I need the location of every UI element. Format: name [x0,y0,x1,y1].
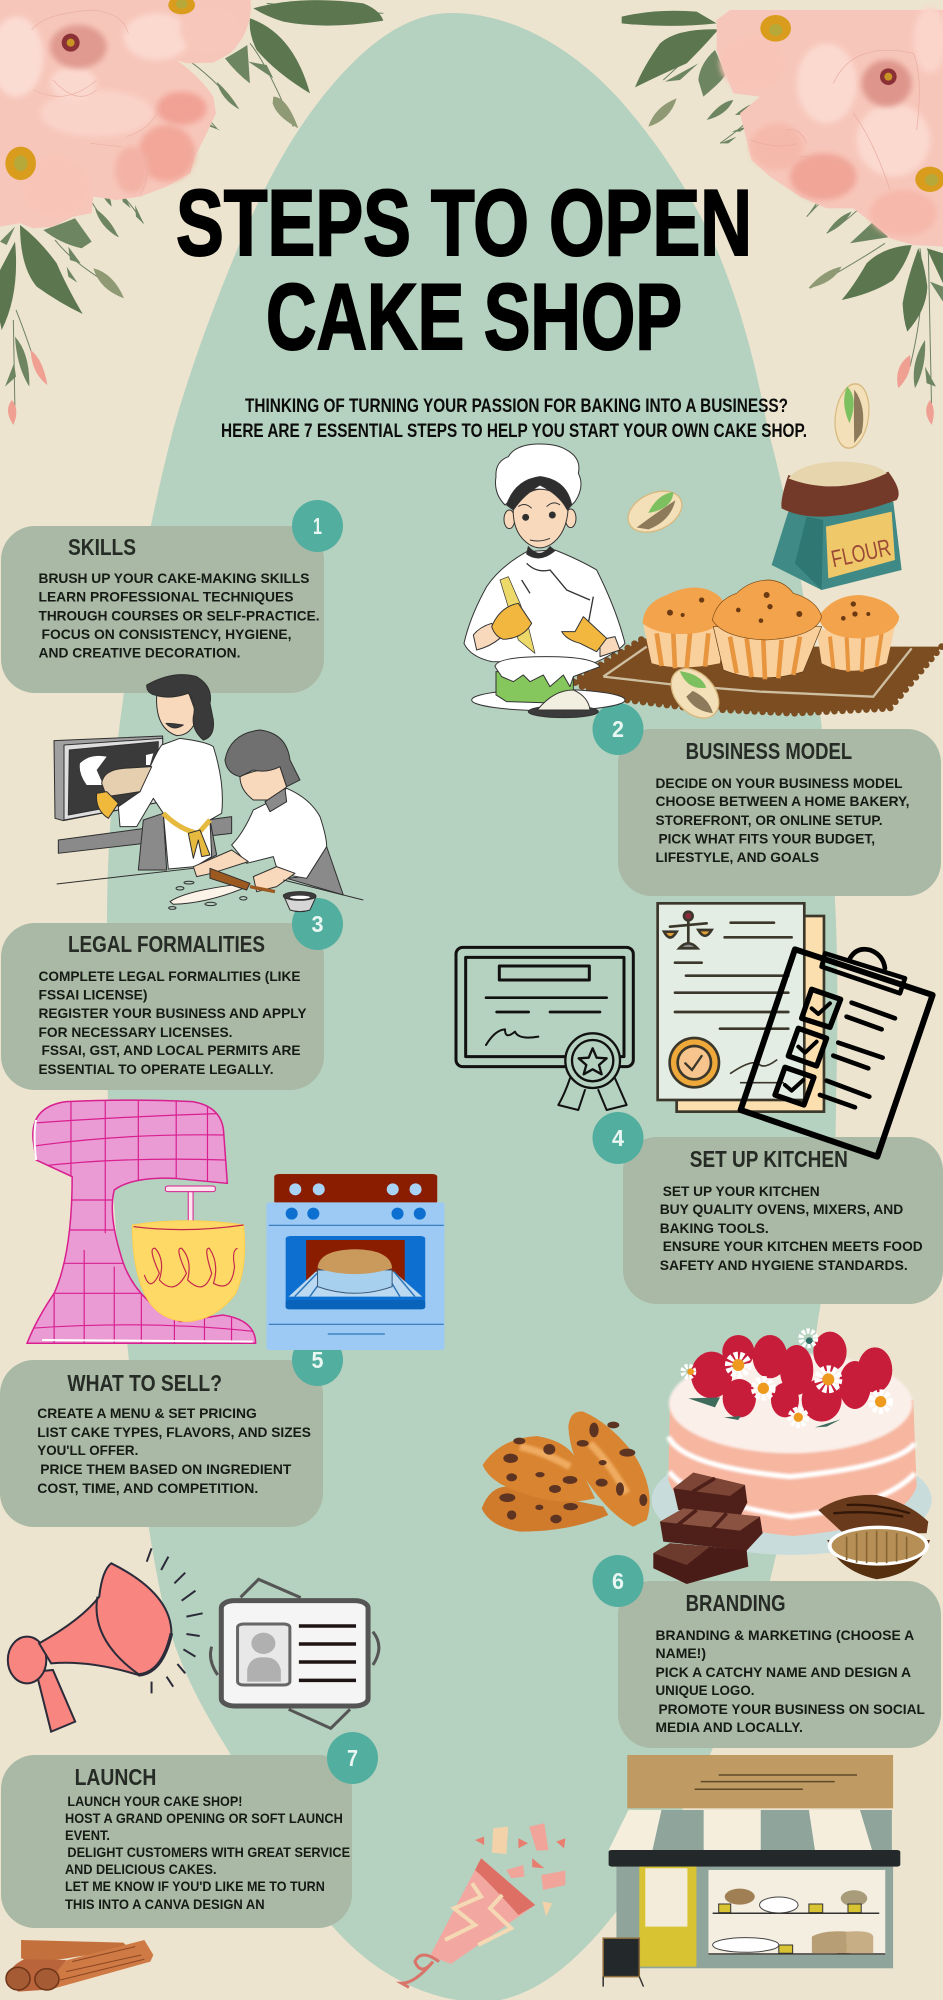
text: launch body: THIS INTO A CANVA DESIGN AN [65,1896,265,1912]
title: CAKE SHOP [266,264,682,369]
icon: oven [266,1174,444,1350]
text: launch body: DELIGHT CUSTOMERS WITH GREAT SERVICE [67,1844,350,1860]
badge 4: 4 [612,1125,624,1151]
text: kitchen body: BUY QUALITY OVENS, MIXERS, AND [660,1201,903,1217]
text: business model body: STOREFRONT, OR ONLINE SETUP. [656,812,882,828]
badge 3 [292,898,343,950]
icon: center muffin [712,580,822,679]
icon: stand mixer [27,1100,256,1343]
subtitle: THINKING OF TURNING YOUR PASSION FOR BAKING INTO A BUSINESS? [245,395,788,417]
text: branding body: UNIQUE LOGO. [656,1682,754,1698]
badge 2: 2 [612,716,624,742]
shop door [639,1867,696,1967]
gloves [492,603,532,639]
text: legal body: FSSAI, GST, AND LOCAL PERMITS ARE [42,1042,300,1058]
text: kitchen body [660,1183,923,1273]
pink blooms left [0,0,251,228]
badge 1: 1 [313,513,322,539]
illustration: chef [464,444,625,718]
text: legal body: COMPLETE LEGAL FORMALITIES (LIKE [38,968,300,984]
text: what to sell body [37,1405,311,1496]
text: launch body: AND DELICIOUS CAKES. [65,1861,216,1877]
panel: step 2 business model [592,703,941,896]
title: STEPS TO OPEN [176,170,752,275]
heading: branding: BRANDING [686,1590,786,1616]
badge 7: 7 [347,1745,358,1771]
badge 3: 3 [312,911,324,937]
panel: step 6 branding [592,1555,941,1748]
panel: step 5 what to sell [0,1334,343,1527]
walls [616,1867,893,1968]
text: skills body: AND CREATIVE DECORATION. [38,644,240,660]
text: legal body: FOR NECESSARY LICENSES. [38,1024,232,1040]
text: launch body: EVENT. [65,1827,110,1843]
subtitle [221,395,807,442]
panel: step 4 set up kitchen [592,1112,943,1304]
badge 4 [592,1112,644,1164]
text: launch body: LAUNCH YOUR CAKE SHOP! [67,1793,242,1809]
text: skills body: BRUSH UP YOUR CAKE-MAKING SKILLS [38,570,310,586]
icon: pistachio [622,483,688,540]
badge 2 [592,703,644,755]
mixer bowl [132,1186,245,1322]
icon: cinnamon sticks [6,1940,153,1992]
icon: chocolate bars [653,1473,763,1584]
text: branding body: PROMOTE YOUR BUSINESS ON SOCIAL [658,1701,925,1717]
text: launch body [65,1793,350,1912]
illustration: bakery shop [603,1755,900,1987]
icon: legal document [658,903,824,1112]
leaves and stems left [0,0,383,425]
text: branding body: MEDIA AND LOCALLY. [656,1719,803,1735]
text: kitchen body: SAFETY AND HYGIENE STANDARDS. [660,1257,908,1273]
head [504,510,515,529]
text: branding body: NAME!) [656,1645,706,1661]
illustration: legal documents [456,903,933,1157]
text: what to sell body: YOU'LL OFFER. [37,1442,138,1458]
oven [54,736,163,821]
badge 1 [292,500,343,552]
text: skills body: THROUGH COURSES OR SELF-PRACTICE. [38,608,320,624]
text: legal body: REGISTER YOUR BUSINESS AND APPLY [38,1005,307,1021]
icon: party popper [402,1823,565,1987]
illustration: muffins flour and pistachios [464,444,942,727]
icon: certificate [456,947,633,1110]
floral corner: top left [0,0,383,425]
badge 7 [327,1732,378,1784]
text: kitchen body: BAKING TOOLS. [660,1220,769,1236]
heading: what to sell: WHAT TO SELL? [67,1370,222,1396]
icon: id card [210,1579,379,1728]
illustration: two bakers [54,675,363,912]
text: business model body [656,775,910,865]
text: skills body: LEARN PROFESSIONAL TECHNIQUES [38,588,294,604]
daisies [683,1331,889,1425]
icon: pistachio on cloth [662,659,728,727]
text: business model body: DECIDE ON YOUR BUSINESS MODEL [656,775,903,791]
work table [57,868,363,900]
text: branding body: BRANDING & MARKETING (CHOOSE A [656,1627,914,1643]
illustration: cake cookies chocolate and cocoa [482,1331,932,1584]
text: what to sell body: CREATE A MENU & SET PRICING [37,1405,257,1421]
baker two [193,730,343,895]
piping bag [500,577,535,653]
text: launch body: LET ME KNOW IF YOU'D LIKE ME TO TURN [65,1878,325,1894]
panel: step 3 legal formalities [1,898,343,1090]
text: kitchen body: SET UP YOUR KITCHEN [663,1183,820,1199]
icon: cocoa pod [818,1495,930,1579]
icon: flour sack [772,462,902,590]
pink blooms right [717,7,943,247]
heading: set up kitchen: SET UP KITCHEN [690,1146,848,1172]
chalkboard [603,1938,643,1987]
heading: legal formalities: LEGAL FORMALITIES [68,931,265,957]
shop sign [627,1755,893,1808]
text: business model body: CHOOSE BETWEEN A HOME BAKERY, [656,793,910,809]
text: kitchen body: ENSURE YOUR KITCHEN MEETS FOOD [663,1238,923,1254]
central green oval [107,13,837,2000]
badge 6: 6 [612,1568,624,1594]
heading: skills: SKILLS [68,534,136,560]
text: what to sell body: LIST CAKE TYPES, FLAVORS, AND SIZES [37,1424,311,1440]
text: what to sell body: COST, TIME, AND COMPETITION. [37,1480,258,1496]
shop window [708,1870,885,1955]
badge 5 [292,1334,343,1386]
baker one [96,675,222,870]
leaves and stems right [622,11,943,425]
heading: launch: LAUNCH [75,1764,156,1790]
icon: clipboard checklist [741,949,933,1157]
icon: brown cloth [573,638,942,713]
cake [496,672,573,703]
text: business model body: PICK WHAT FITS YOUR BUDGET, [658,830,875,846]
icon: layered strawberry cake [652,1331,932,1555]
icon: megaphone [8,1548,203,1732]
panel: step 7 launch [1,1732,378,1928]
text: legal body: FSSAI LICENSE) [38,986,148,1002]
icon: flour sack: FLOUR [829,534,893,573]
counter [58,817,232,853]
text: what to sell body: PRICE THEM BASED ON INGREDIENT [40,1461,292,1477]
text: skills body [38,570,320,660]
dough and rolling pin [169,868,275,909]
icon: left muffin [643,587,727,668]
badge 6 [592,1555,644,1607]
body [464,550,625,663]
badge 5: 5 [312,1347,324,1373]
text: legal body [38,968,307,1077]
text: launch body: HOST A GRAND OPENING OR SOFT LAUNCH [65,1810,343,1826]
strawberries [691,1332,892,1422]
heading: business model: BUSINESS MODEL [686,738,852,764]
icon: pistachio top right [831,382,873,450]
title [176,170,752,369]
icon: right muffin [817,595,899,672]
icon: chocolate cookies [482,1412,650,1532]
shop awning [609,1810,900,1867]
bowl [283,892,316,912]
text: skills body: FOCUS ON CONSISTENCY, HYGIENE, [42,626,292,642]
plate [472,689,625,711]
panel: step 1 skills [1,500,343,693]
small plate and cream [528,706,598,718]
text: business model body: LIFESTYLE, AND GOALS [656,849,819,865]
text: legal body: ESSENTIAL TO OPERATE LEGALLY. [38,1061,274,1077]
text: branding body: PICK A CATCHY NAME AND DESIGN A [656,1664,911,1680]
floral corner: top right [622,7,943,425]
text: branding body [656,1627,925,1735]
